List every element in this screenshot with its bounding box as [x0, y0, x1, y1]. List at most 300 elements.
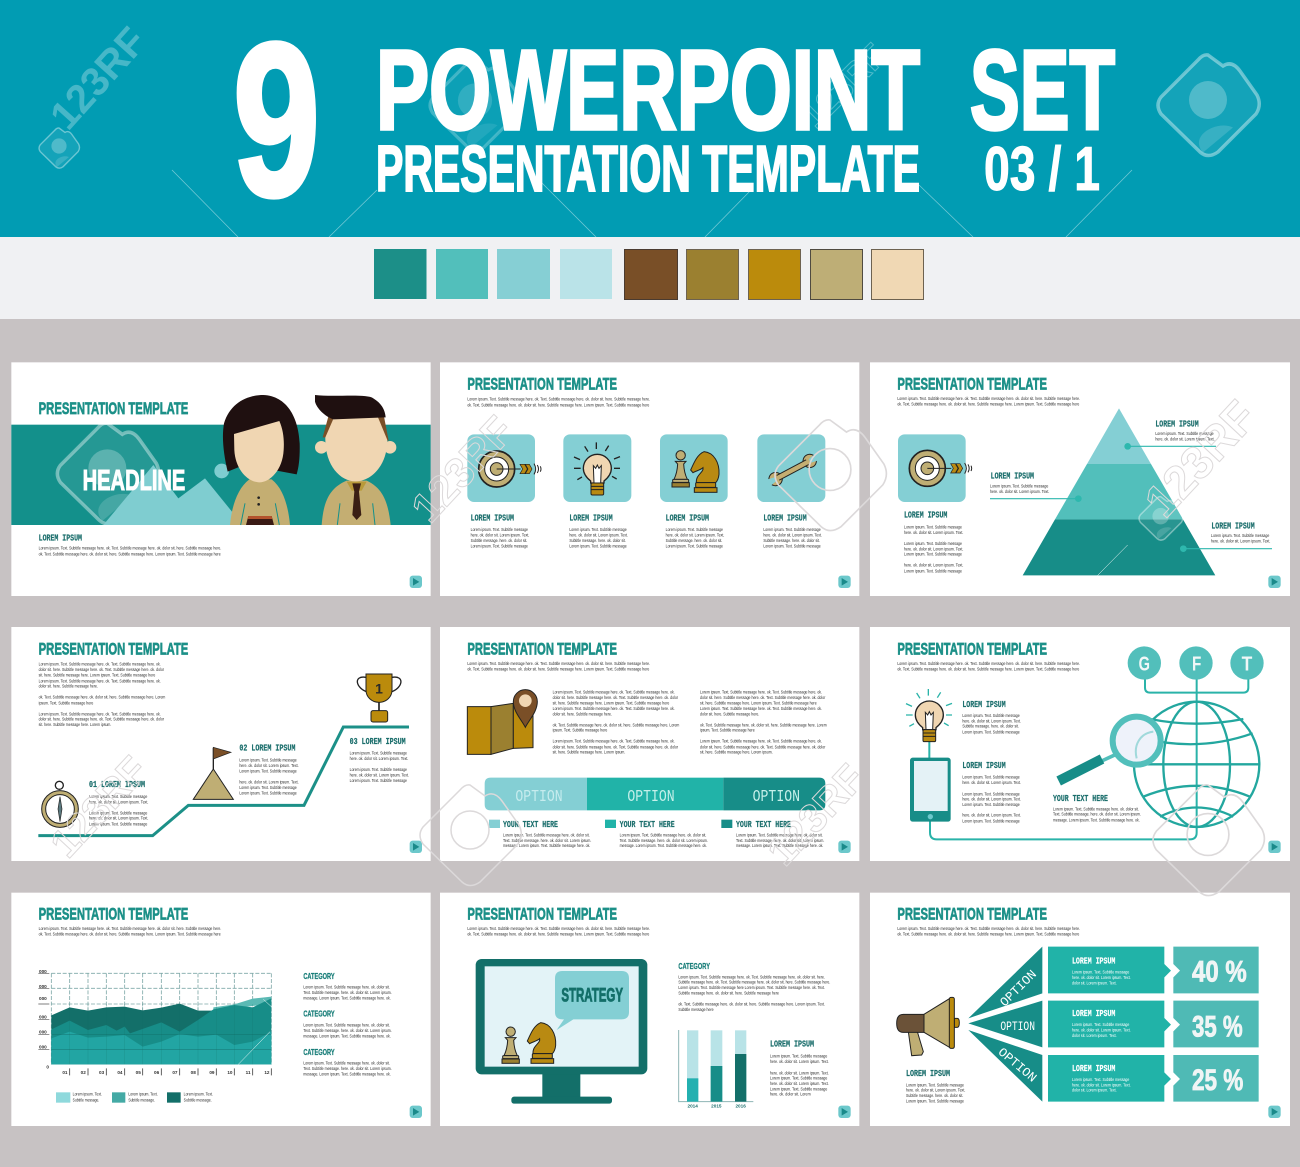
play button: [838, 841, 851, 853]
intro text: Lorem ipsum. Text. Subtitle message here. ok. Text. Subtitle message here. ok. dolor sit. here. Subtitle message here.: [467, 926, 650, 931]
intro text: ok. Text. Subtitle message here. ok. dolor sit. here. Subtitle message here. Lorem ipsum. Text. Subtitle message here: [467, 667, 650, 672]
category block 1: [303, 971, 392, 1001]
title: SET: SET: [970, 27, 1115, 153]
pyramid label top: LOREM IPSUM: [1155, 419, 1199, 429]
x axis labels: 01: [62, 1070, 68, 1075]
text block: lorem ipsum: [39, 534, 221, 556]
text block 3: Subtitle message. here. ok. dolor sit.: [666, 538, 722, 543]
row 1 percentage: 40 %: [1192, 956, 1247, 989]
row 2 arrow box: LOREM IPSUM: [1072, 1009, 1115, 1019]
chart legend: Lorem ipsum. Text.: [184, 1092, 213, 1097]
intro text: dolor sit. here. Subtitle message here. ok. Text. Subtitle message here. ok. dolor: [39, 667, 164, 672]
icon: wrench: [757, 434, 825, 502]
text block lorem ipsum: here. ok. dolor sit. Lorem: [770, 1092, 811, 1097]
text block 01: here. ok. dolor sit. Lorem ipsum. Text.: [89, 816, 148, 821]
legend item 2: message. Lorem ipsum. Text. Subtitle message here. ok.: [620, 843, 707, 848]
play button: [1268, 576, 1281, 588]
stacked bar chart: 2014: [687, 1104, 698, 1109]
row 1 arrow box: here. ok. dolor sit. Lorem ipsum. Text.: [1072, 975, 1131, 980]
text block lower: Lorem ipsum. Text. Subtitle message: [962, 775, 1020, 780]
pyramid label bottom: here. ok. dolor sit. Lorem ipsum. Text.: [1211, 539, 1270, 544]
mountain graphic: [103, 465, 233, 525]
text block 02: Lorem ipsum. Text. Subtitle message: [239, 785, 297, 790]
panel: slide 7 area chart: [11, 893, 431, 1126]
text block lorem ipsum: [770, 1040, 829, 1097]
panel: slide 9 megaphone percentages: [870, 893, 1290, 1126]
x axis labels: 07: [172, 1070, 178, 1075]
text block 02: Lorem ipsum. Text. Subtitle message: [239, 791, 297, 796]
intro text: [897, 396, 1080, 407]
subtitle: PRESENTATION TEMPLATE: PRESENTATION TEMPLATE: [376, 132, 920, 205]
play button: [410, 576, 422, 588]
text block 02: here. ok. dolor sit. Lorem ipsum. Text.: [239, 763, 299, 768]
text column 1: [553, 690, 679, 755]
text block lower: here. ok. dolor sit. Lorem ipsum. Text.: [962, 813, 1021, 818]
panel: slide 3 pyramid: [870, 362, 1290, 596]
text block 4: Lorem ipsum. Text. Subtitle message: [763, 527, 821, 532]
left text block: Lorem ipsum. Text. Subtitle message: [904, 524, 962, 529]
pyramid label middle: [990, 472, 1049, 494]
speech bubble: strategy: [555, 971, 629, 1030]
slide title: PRESENTATION TEMPLATE: [39, 399, 188, 418]
legend item 2: Lorem ipsum. Text. Subtitle message here. ok. dolor sit.: [620, 833, 706, 838]
row 1 arrow box: Lorem ipsum. Text. Subtitle message: [1072, 970, 1130, 975]
category text: Subtitle message here. ok. dolor sit. here. Subtitle message here: [678, 991, 779, 996]
category block 2: Text. Subtitle message. here. ok. dolor sit. Lorem ipsum.: [303, 1028, 392, 1033]
icon: light bulb: [906, 689, 952, 742]
pyramid label bottom: LOREM IPSUM: [1211, 522, 1255, 532]
globe: [1134, 702, 1259, 827]
text block 2: Lorem ipsum. Text. Subtitle message: [569, 527, 627, 532]
legend item 1: YOUR TEXT HERE: [503, 820, 558, 830]
option bar: [485, 778, 825, 810]
intro text: [39, 926, 221, 937]
text block under megaphone: here. ok. dolor sit. Lorem ipsum. Text.: [906, 1088, 965, 1093]
row 2 arrow box: [1048, 1001, 1171, 1047]
legend item 3: message. Lorem ipsum. Text. Subtitle message here. ok.: [736, 843, 823, 848]
icon: light bulb: [563, 434, 631, 502]
panel: slide 1 headline: [11, 362, 431, 596]
pyramid label middle: LOREM IPSUM: [991, 472, 1034, 482]
watermarks: 123RF: [759, 756, 873, 874]
text block 4: LOREM IPSUM: [763, 514, 807, 524]
option ray middle: [968, 1001, 1042, 1047]
text block 03: Lorem ipsum. Text. Subtitle message: [350, 778, 407, 783]
text column 2: ok. Text. Subtitle message here. ok. dolor sit. here. Subtitle message here. Lorem: [700, 722, 827, 727]
circle T: T: [1242, 652, 1253, 675]
legend item 2: Text. Subtitle message. here. ok. dolor sit. Lorem ipsum.: [620, 838, 708, 843]
text block lorem ipsum: Lorem ipsum. Text. Subtitle message: [770, 1054, 828, 1059]
intro text: Lorem ipsum. Text. Subtitle message here. ok. Text. Subtitle message here. ok. dolor sit. here. Subtitle message here.: [897, 396, 1080, 401]
intro text: [897, 661, 1080, 672]
intro text: ipsum. Text. Subtitle message here: [39, 700, 94, 705]
text block 2: here. ok. dolor sit. Lorem ipsum. Text.: [569, 533, 628, 538]
x axis labels: 12: [264, 1070, 270, 1075]
text block lower: Lorem ipsum. Text. Subtitle message: [962, 818, 1020, 823]
chart legend: Lorem ipsum. Text.: [73, 1092, 102, 1097]
text column 2: sit. here. Subtitle message here. Lorem ipsum. Text. Subtitle message here: [700, 700, 817, 705]
intro text: Lorem ipsum. Text. Subtitle message here. ok. Text. Subtitle message here. ok. dolor sit. here. Subtitle message here.: [897, 661, 1080, 666]
intro text: [467, 397, 650, 407]
icon: map with pin: [467, 690, 537, 754]
pyramid label top: Lorem ipsum. Text. Subtitle message: [1155, 431, 1214, 436]
stacked bar chart: 2015: [711, 1104, 722, 1109]
y axis labels: 000: [39, 996, 47, 1001]
text block 2: Subtitle message. here. ok. dolor sit.: [569, 538, 626, 543]
text block 01: Lorem ipsum. Text. Subtitle message: [89, 821, 148, 826]
play button: [410, 1106, 422, 1118]
option bar: OPTION: [753, 788, 800, 807]
text block 4: Lorem ipsum. Text. Subtitle message: [763, 544, 821, 549]
row 2 arrow box: Lorem ipsum. Text. Subtitle message: [1072, 1022, 1130, 1027]
colour palette band: [0, 237, 1300, 319]
panel: slide 6 globe: [870, 627, 1290, 861]
pyramid label top: here. ok. dolor sit. Lorem ipsum. Text.: [1155, 437, 1215, 442]
pyramid label middle: Lorem ipsum. Text. Subtitle message: [990, 483, 1049, 488]
text block your text here: [1053, 794, 1141, 822]
text block 02: Lorem ipsum. Text. Subtitle message: [239, 758, 297, 763]
category text: Subtitle message here: [678, 1007, 714, 1012]
category block 1: CATEGORY: [303, 971, 335, 981]
pyramid chart: [990, 408, 1272, 575]
text column 2: dolor sit. here. Subtitle message here. ok. Text. Subtitle message here. ok. dolor: [700, 695, 826, 700]
text block 03: here. ok. dolor sit. Lorem ipsum. Text.: [350, 772, 409, 777]
y axis labels: 000: [39, 1029, 47, 1034]
pyramid label bottom: Lorem ipsum. Text. Subtitle message: [1211, 533, 1270, 538]
text block under megaphone: LOREM IPSUM: [906, 1069, 950, 1079]
text block upper: here. ok. dolor sit. Lorem ipsum. Text.: [962, 718, 1021, 723]
circle T: [1230, 646, 1264, 680]
text block upper: Subtitle message. here. ok. dolor sit.: [962, 724, 1019, 729]
intro text: dolor sit. here. Subtitle message here.: [39, 684, 98, 689]
intro text: sit. here. Subtitle message here. Lorem ipsum. Text. Subtitle message here: [39, 673, 156, 678]
text column 1: ipsum. Text. Subtitle message here: [553, 728, 608, 733]
text block 03: here. ok. dolor sit. Lorem ipsum. Text.: [350, 756, 408, 761]
icon: chess pieces: [660, 434, 728, 502]
intro text: Lorem ipsum. Text. Subtitle message here. ok. Text. Subtitle message here. ok. dolor sit. here. Subtitle message here.: [467, 661, 650, 666]
option ray middle: OPTION: [1000, 1019, 1035, 1034]
text block 2: LOREM IPSUM: [569, 514, 613, 524]
text block 02: 02 LOREM IPSUM: [239, 744, 295, 754]
watermarks: 123RF: [42, 19, 155, 138]
option ray top: OPTION: [997, 967, 1040, 1010]
connector lines: [929, 678, 1248, 839]
play button: [1268, 841, 1281, 853]
y axis labels: 000: [39, 1044, 47, 1049]
watermarks: 123RF: [795, 37, 894, 136]
intro text: sit. here. Subtitle message here. Lorem ipsum.: [39, 722, 111, 727]
legend item 1: [489, 820, 591, 848]
text block lower: here. ok. dolor sit. Lorem ipsum. Text.: [962, 780, 1021, 785]
play button: [410, 841, 422, 853]
x axis labels: 05: [136, 1070, 141, 1075]
row 1 percentage: [1173, 947, 1259, 993]
text column 2: dolor sit. here. Subtitle message here.: [700, 711, 759, 716]
chart legend: Subtitle message.: [73, 1098, 99, 1103]
text block 3: LOREM IPSUM: [666, 514, 709, 524]
intro text: ok. Text. Subtitle message here. ok. dolor sit. here. Subtitle message here. Lorem ipsum. Text. Subtitle message here: [897, 667, 1080, 672]
row 3 arrow box: LOREM IPSUM: [1072, 1064, 1115, 1074]
pyramid label top: [1155, 419, 1215, 442]
text block lorem ipsum: LOREM IPSUM: [770, 1040, 814, 1050]
text column 1: sit. here. Subtitle message here. Lorem ipsum.: [553, 750, 625, 755]
legend item 1: message. Lorem ipsum. Text. Subtitle message here. ok.: [503, 843, 590, 848]
icon: pawn: [502, 1027, 519, 1063]
watermarks: [39, 19, 1266, 896]
text block upper: Lorem ipsum. Text. Subtitle message: [962, 729, 1020, 734]
text block lorem ipsum: here. ok. dolor sit. Lorem ipsum. Text.: [770, 1059, 829, 1064]
icon: magnifying glass: [1059, 717, 1161, 781]
text block your text here: Text. Subtitle message. here. ok. dolor sit. Lorem ipsum.: [1053, 812, 1141, 817]
monitor: [476, 959, 647, 1104]
intro text: ok. Text. Subtitle message here. ok. dolor sit. here. Subtitle message here. Lorem ipsum. Text. Subtitle message here: [897, 932, 1080, 937]
left text block: here. ok. dolor sit. Lorem ipsum. Text.: [904, 563, 963, 568]
row 2 percentage: 35 %: [1192, 1011, 1243, 1044]
x axis labels: 06: [154, 1070, 160, 1075]
watermark stamp: [57, 423, 159, 524]
left text block: [904, 510, 963, 573]
text block 3: Lorem ipsum. Text. Subtitle message: [666, 544, 723, 549]
row 1 arrow box: [1048, 947, 1171, 993]
row 2 arrow box: dolor sit. Lorem ipsum. Text.: [1072, 1033, 1117, 1038]
intro text: [467, 661, 650, 672]
headline: HEADLINE: [83, 465, 185, 497]
text block 4: here. ok. dolor sit. Lorem ipsum. Text.: [763, 533, 822, 538]
y axis labels: 000: [39, 1014, 47, 1019]
pyramid label middle: here. ok. dolor sit. Lorem ipsum. Text.: [990, 489, 1049, 494]
text block: lorem ipsum: LOREM IPSUM: [39, 534, 82, 544]
watermarks: 123RF: [402, 407, 523, 531]
chart legend: Subtitle message.: [184, 1098, 212, 1103]
text block 03: [350, 737, 409, 783]
legend item 3: Text. Subtitle message. here. ok. dolor sit. Lorem ipsum.: [736, 838, 824, 843]
big numeral 9: 9: [233, 0, 320, 242]
slide title: PRESENTATION TEMPLATE: [39, 904, 188, 923]
icon: target: [467, 434, 541, 502]
watermarks: 123RF: [42, 748, 156, 866]
row 2 arrow box: here. ok. dolor sit. Lorem ipsum. Text.: [1072, 1027, 1131, 1032]
category text: CATEGORY: [678, 961, 710, 971]
left text block: LOREM IPSUM: [904, 510, 947, 520]
watermarks: 123RF: [1134, 390, 1266, 527]
text block 1: LOREM IPSUM: [471, 514, 514, 524]
category block 3: CATEGORY: [303, 1047, 335, 1057]
legend item 3: Lorem ipsum. Text. Subtitle message here. ok. dolor sit.: [736, 833, 823, 838]
text column 1: sit. here. Subtitle message here. Lorem ipsum. Text. Subtitle message here: [553, 700, 670, 705]
intro text: Lorem ipsum. Text. Subtitle message here. ok. Text. Subtitle message here. ok.: [39, 678, 161, 683]
left text block: Lorem ipsum. Text. Subtitle message: [904, 541, 962, 546]
text block 1: [471, 514, 529, 549]
text block under megaphone: Lorem ipsum. Text. Subtitle message: [906, 1098, 964, 1103]
slide title: PRESENTATION TEMPLATE: [897, 904, 1047, 923]
text column 2: dolor sit. here. Subtitle message here. ok. Text. Subtitle message here. ok. dolor: [700, 744, 826, 749]
text block 02: [239, 744, 299, 796]
text column 1: Lorem ipsum. Text. Subtitle message here. ok. Text. Subtitle message here. ok.: [553, 739, 675, 744]
circle F: F: [1192, 652, 1201, 675]
legend item 3: YOUR TEXT HERE: [736, 820, 791, 830]
y axis labels: 000: [39, 969, 47, 974]
category text: [678, 961, 830, 1012]
text block 02: Lorem ipsum. Text. Subtitle message: [239, 769, 297, 774]
icon: trophy: 1: [375, 680, 383, 696]
intro text: ok. Text. Subtitle message here. ok. dolor sit. here. Subtitle message here. Lorem: [39, 695, 165, 700]
intro text: [467, 926, 650, 937]
text block your text here: YOUR TEXT HERE: [1053, 794, 1108, 804]
text column 2: sit. here. Subtitle message here. Lorem ipsum.: [700, 750, 773, 755]
text block 4: [763, 514, 822, 549]
play button: [838, 1106, 851, 1118]
text block 03: Lorem ipsum. Text. Subtitle message: [350, 751, 407, 756]
text column 1: Lorem ipsum. Text. Subtitle message here. ok. Text. Subtitle message here. ok.: [553, 690, 675, 695]
intro text: Lorem ipsum. Text. Subtitle message here. ok. Text. Subtitle message here. ok. dolor sit. here. Subtitle message here.: [467, 397, 650, 402]
x axis labels: 10: [227, 1070, 233, 1075]
option bar: OPTION: [515, 788, 563, 807]
panel: slide 8 strategy monitor: [440, 893, 859, 1126]
text block lorem ipsum: Lorem ipsum. Text. Subtitle message: [770, 1076, 828, 1081]
intro text: ok. Text. Subtitle message here. ok. dolor sit. here. Subtitle message here. Lorem ipsum. Text. Subtitle message here: [39, 932, 221, 937]
text block 3: here. ok. dolor sit. Lorem ipsum. Text.: [666, 533, 724, 538]
category block 1: Text. Subtitle message. here. ok. dolor sit. Lorem ipsum.: [303, 990, 392, 995]
option bar: OPTION: [627, 788, 675, 807]
intro text: [897, 926, 1080, 937]
row 1 arrow box: dolor sit. Lorem ipsum. Text.: [1072, 981, 1117, 986]
woman figure: [214, 395, 300, 525]
row 2 percentage: [1173, 1001, 1259, 1047]
legend item 2: [605, 820, 708, 848]
stepped line: [38, 727, 409, 836]
slide title: PRESENTATION TEMPLATE: [467, 374, 617, 393]
icon: compass: [42, 781, 78, 827]
option ray bottom: [968, 1030, 1042, 1102]
category block 2: CATEGORY: [303, 1009, 335, 1019]
x axis labels: 09: [209, 1070, 215, 1075]
row 3 arrow box: dolor sit. Lorem ipsum. Text.: [1072, 1088, 1117, 1093]
icon: trophy: [357, 674, 401, 722]
text block 01: [89, 780, 148, 826]
category block 3: message. Lorem ipsum. Text. Subtitle message here. ok.: [303, 1072, 391, 1077]
header banner: [0, 0, 1300, 242]
stacked bar chart: 2016: [735, 1104, 746, 1109]
text block 03: 03 LOREM IPSUM: [350, 737, 406, 747]
category block 2: message. Lorem ipsum. Text. Subtitle message here. ok.: [303, 1034, 391, 1039]
chart legend: [56, 1092, 213, 1103]
intro text: Lorem ipsum. Text. Subtitle message here. ok. Text. Subtitle message here. ok. dolor sit. here. Subtitle message here.: [897, 926, 1080, 931]
category block 1: Lorem ipsum. Text. Subtitle message here. ok. dolor sit.: [303, 984, 390, 989]
man figure: [315, 395, 396, 525]
text block 01: Lorem ipsum. Text. Subtitle message: [89, 794, 148, 799]
text block 2: Lorem ipsum. Text. Subtitle message: [569, 544, 627, 549]
subtitle: 03 / 1: 03 / 1: [984, 135, 1100, 204]
intro text: [39, 662, 165, 727]
text block 02: here. ok. dolor sit. Lorem ipsum. Text.: [239, 780, 299, 785]
intro text: Lorem ipsum. Text. Subtitle message here. ok. Text. Subtitle message here. ok. dolor sit. here. Subtitle message here.: [39, 926, 221, 931]
row 3 percentage: [1173, 1055, 1259, 1102]
circle G: [1128, 646, 1161, 680]
text block 3: [666, 514, 724, 549]
text column 2: ipsum. Text. Subtitle message here: [700, 728, 755, 733]
text block lower: Lorem ipsum. Text. Subtitle message: [962, 791, 1020, 796]
text block 1: Lorem ipsum. Text. Subtitle message: [471, 544, 528, 549]
text block your text here: Lorem ipsum. Text. Subtitle message here. ok. dolor sit.: [1053, 806, 1139, 811]
category text: Subtitle message here. ok. Text. Subtitle message here. ok. dolor sit. here. Subtitle message here.: [678, 980, 830, 985]
text block lorem ipsum: here. ok. dolor sit. Lorem ipsum. Text.: [770, 1081, 829, 1086]
x axis labels: 03: [99, 1070, 105, 1075]
text block 1: here. ok. dolor sit. Lorem ipsum. Text.: [471, 533, 529, 538]
text column 1: ok. Text. Subtitle message here. ok. dolor sit. here. Subtitle message here. Lorem: [553, 722, 679, 727]
slide title: PRESENTATION TEMPLATE: [897, 639, 1047, 658]
y axis labels: [38, 969, 49, 1070]
row 3 percentage: 25 %: [1192, 1064, 1243, 1097]
text block under megaphone: [906, 1069, 965, 1103]
pyramid label bottom: [1211, 522, 1270, 544]
row 1 arrow box: LOREM IPSUM: [1072, 957, 1115, 967]
text block lower: Lorem ipsum. Text. Subtitle message: [962, 802, 1020, 807]
icon: megaphone: [897, 997, 959, 1056]
text block 01: here. ok. dolor sit. Lorem ipsum. Text.: [89, 799, 148, 804]
text block 4: Subtitle message. here. ok. dolor sit.: [763, 538, 820, 543]
text block 03: Lorem ipsum. Text. Subtitle message: [350, 767, 407, 772]
text block lorem ipsum: here. ok. dolor sit. Lorem ipsum. Text.: [770, 1070, 829, 1075]
text block upper: Lorem ipsum. Text. Subtitle message: [962, 713, 1020, 718]
text block upper: [962, 700, 1021, 734]
category text: Lorem ipsum. Text. Subtitle message here Lorem ipsum. Text. Subtitle message here. ok. Text.: [678, 985, 825, 990]
text block lower: LOREM IPSUM: [962, 761, 1006, 771]
intro text: ok. Text. Subtitle message here. ok. dolor sit. here. Subtitle message here. Lorem ipsum. Text. Subtitle message here: [467, 402, 650, 407]
category block 3: Text. Subtitle message. here. ok. dolor sit. Lorem ipsum.: [303, 1066, 392, 1071]
panel: slide 5 map and options: [440, 627, 859, 861]
stacked bar chart: [679, 1030, 753, 1109]
text block 1: Subtitle message. here. ok. dolor sit.: [471, 538, 527, 543]
row 3 arrow box: here. ok. dolor sit. Lorem ipsum. Text.: [1072, 1082, 1131, 1087]
left text block: here. ok. dolor sit. Lorem ipsum. Text.: [904, 530, 963, 535]
option ray top: [968, 947, 1042, 1018]
y axis labels: 0: [46, 1065, 49, 1070]
text block your text here: message. Lorem ipsum. Text. Subtitle message here. ok.: [1053, 817, 1140, 822]
category block 2: [303, 1009, 392, 1039]
text column 2: Lorem ipsum. Text. Subtitle message here. ok. Text. Subtitle message here. ok.: [700, 690, 822, 695]
icon: flag on hill: [193, 747, 233, 799]
text block upper: LOREM IPSUM: [962, 700, 1006, 710]
slide title: PRESENTATION TEMPLATE: [467, 904, 617, 923]
chart legend: Subtitle message.: [128, 1098, 155, 1103]
left text block: here. ok. dolor sit. Lorem ipsum. Text.: [904, 546, 963, 551]
category block 2: Lorem ipsum. Text. Subtitle message here. ok. dolor sit.: [303, 1022, 390, 1027]
text block under megaphone: Lorem ipsum. Text. Subtitle message: [906, 1082, 964, 1087]
chart legend: Lorem ipsum. Text.: [128, 1092, 158, 1097]
text column 2: Lorem ipsum. Text. Subtitle message here. ok. Text. Subtitle message here. ok.: [700, 739, 822, 744]
text column 2: Lorem ipsum. Text. Subtitle message here. ok. Text. Subtitle message here. ok.: [700, 706, 822, 711]
intro text: Lorem ipsum. Text. Subtitle message here. ok. Text. Subtitle message here. ok.: [39, 711, 161, 716]
text block 01: Lorem ipsum. Text. Subtitle message: [89, 810, 148, 815]
intro text: Lorem ipsum. Text. Subtitle message here. ok. Text. Subtitle message here. ok.: [39, 662, 161, 667]
text block: lorem ipsum: Lorem ipsum. Text. Subtitle message here. ok. Text. Subtitle message here. ok. dolor sit. here. Subtitle message here.: [39, 546, 221, 551]
slide title: PRESENTATION TEMPLATE: [897, 374, 1047, 393]
slide title: PRESENTATION TEMPLATE: [39, 639, 188, 658]
intro text: dolor sit. here. Subtitle message here. ok. Text. Subtitle message here. ok. dolor: [39, 717, 164, 722]
legend item 1: Text. Subtitle message. here. ok. dolor sit. Lorem ipsum.: [503, 838, 591, 843]
text block under megaphone: Subtitle message. here. ok. dolor sit.: [906, 1093, 963, 1098]
play button: [1268, 1106, 1281, 1118]
intro text: ok. Text. Subtitle message here. ok. dolor sit. here. Subtitle message here. Lorem ipsum. Text. Subtitle message here: [897, 402, 1080, 407]
circle G: G: [1139, 652, 1150, 675]
title: POWERPOINT: POWERPOINT: [376, 27, 920, 153]
text column 1: dolor sit. here. Subtitle message here. ok. Text. Subtitle message here. ok. dolor: [553, 695, 678, 700]
option ray bottom: OPTION: [995, 1045, 1040, 1086]
text column 1: dolor sit. here. Subtitle message here. ok. Text. Subtitle message here. ok. dolor: [553, 744, 678, 749]
x axis labels: 02: [81, 1070, 86, 1075]
left text block: Lorem ipsum. Text. Subtitle message: [904, 568, 962, 573]
text column 2: [700, 690, 827, 755]
